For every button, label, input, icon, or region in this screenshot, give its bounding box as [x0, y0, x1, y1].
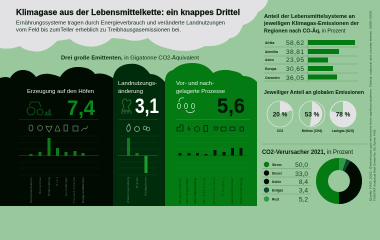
panel: global shares — [264, 90, 364, 133]
heading: jeweiligen Klimagas-Emissionen der — [263, 21, 359, 27]
bar labels: Düngerproduktion — [178, 178, 182, 204]
heading: Erzeugung auf den Höfen — [27, 89, 94, 95]
bar labels: Haushaltskonsum — [230, 177, 234, 204]
row labels: Europa — [265, 67, 277, 71]
source credit: FAOSTAT Analytical Brief Series No. 50. Rome, FAO. — [372, 129, 376, 201]
bar labels: Tierexkremente — [72, 177, 76, 203]
row values: 36,05 — [286, 75, 304, 82]
bar chart — [127, 138, 138, 156]
row values: 23,95 — [286, 57, 304, 64]
row lines — [264, 47, 358, 81]
bar labels: Rinderhaltung — [47, 177, 51, 196]
bar chart — [178, 148, 242, 156]
icons row — [177, 125, 244, 132]
grid — [118, 136, 158, 175]
legend labels — [272, 163, 283, 202]
pie methane: 53 % — [305, 112, 320, 118]
bar labels: Einzelhandel — [212, 178, 216, 204]
pie methane — [299, 101, 325, 133]
bar labels: Vieh — [55, 177, 59, 186]
row values: 58,62 — [286, 40, 304, 47]
divider — [118, 118, 158, 120]
heading: änderung — [118, 89, 143, 95]
legend labels: Kohle — [272, 180, 281, 184]
legend values: 8,4 — [299, 179, 308, 186]
bar labels: Strom im Agrarsektor — [185, 178, 189, 204]
row labels: Asien — [265, 58, 274, 62]
panel: regions table — [263, 14, 359, 82]
icon: tractor — [27, 102, 52, 115]
icon: process cycle — [177, 98, 195, 113]
panel: CO2 polluters — [262, 150, 356, 204]
row labels: Afrika — [265, 41, 275, 45]
legend labels: Diesel — [272, 172, 282, 176]
legend dots — [264, 162, 269, 167]
icon: land use — [122, 99, 131, 114]
value: 7,4 — [67, 97, 95, 120]
intro text: vom Feld bis zumTeller erheblich zu Treibhausgasemissionen bei. — [16, 28, 181, 34]
bar labels: Abfallentsorgung — [239, 178, 243, 204]
bar labels: Transport — [221, 178, 225, 196]
grid — [19, 136, 99, 175]
row labels: Ozeanien — [265, 76, 280, 80]
pie methane: Methan (CH4) — [302, 129, 322, 133]
title: Klimagase aus der Lebensmittelkette: ein knappes Drittel — [16, 7, 240, 17]
bar labels: Brände — [135, 177, 139, 188]
bar labels: Kunstdünger — [64, 177, 68, 196]
heading: Regionen nach CO-Äq, in Prozent — [264, 28, 345, 34]
bar labels — [126, 177, 148, 203]
heading: Anteil der Lebensmittelsysteme an — [264, 14, 355, 20]
legend values: 3,4 — [299, 188, 308, 194]
intro text: Ernährungssysteme tragen durch Energieverbrauch und veränderte Landnutzungen — [16, 20, 225, 26]
row labels — [265, 41, 280, 80]
bar labels — [178, 177, 243, 204]
cloud header background — [0, 0, 268, 52]
bar labels: Verpackung — [202, 178, 206, 204]
row values — [286, 40, 304, 82]
subtitle: Drei große Emittenten, in Gigatonne CO2-Äquivalent — [61, 54, 200, 62]
bar labels: Waldgebiete — [144, 177, 148, 196]
pie nitrous oxide: Lachgas (N2O) — [332, 129, 354, 133]
bar labels: Reisanbau — [38, 177, 42, 194]
panel: Erzeugung auf den Höfen — [0, 67, 113, 206]
legend labels: Rest — [272, 198, 280, 202]
row labels: Amerika — [265, 50, 278, 54]
grid — [176, 136, 250, 175]
value: 5,6 — [217, 95, 245, 118]
row values: 38,81 — [286, 49, 304, 56]
icons row — [127, 124, 150, 132]
heading: Landnutzungs- — [118, 81, 157, 87]
bar labels: Lebensmittelverarbeitung — [193, 178, 197, 204]
intro text — [16, 20, 225, 34]
pie nitrous oxide: 78 % — [336, 112, 351, 118]
legend values: 5,2 — [299, 196, 308, 204]
source credit — [368, 10, 376, 201]
pie CO2: CO2 — [277, 129, 284, 133]
heading: Jeweiliger Anteil an globalen Emissionen — [264, 90, 364, 96]
pie CO2: 20 % — [273, 112, 288, 118]
bar chart — [30, 138, 84, 156]
icons row — [29, 125, 88, 132]
divider — [19, 118, 99, 120]
legend labels: Strom — [272, 163, 282, 167]
pie nitrous oxide — [330, 101, 356, 133]
heading: gelagerte Prozesse — [176, 89, 225, 95]
row lines — [262, 168, 311, 194]
legend values: 50,0 — [295, 162, 308, 169]
bar labels — [29, 177, 85, 203]
heading: CO2-Verursacher 2021, in Prozent — [262, 150, 353, 156]
bar labels: Energie und Maschinen — [81, 177, 85, 203]
bar labels: Waldumwandlung — [126, 177, 130, 203]
legend labels: Erdgas — [272, 188, 283, 192]
bar labels: Reisanbau/Kulturen — [29, 177, 33, 203]
legend values — [295, 162, 308, 204]
panel: Landnutzungsänderung — [113, 64, 165, 206]
legend values: 33,0 — [295, 171, 308, 178]
donut chart — [322, 164, 356, 198]
value: 3,1 — [135, 95, 159, 118]
pie CO2 — [267, 101, 293, 133]
bars — [308, 40, 355, 80]
row values: 30,65 — [286, 66, 304, 73]
source credit: Quelle: FAO, 2022: Greenhouse gas emissions from agrifood systems. Global, regional and country trends, 2000–2020. — [368, 10, 372, 201]
panel: Vor- und nachgelagerte Prozesse — [165, 63, 257, 206]
divider — [176, 118, 250, 120]
heading: Vor- und nach- — [176, 81, 214, 87]
